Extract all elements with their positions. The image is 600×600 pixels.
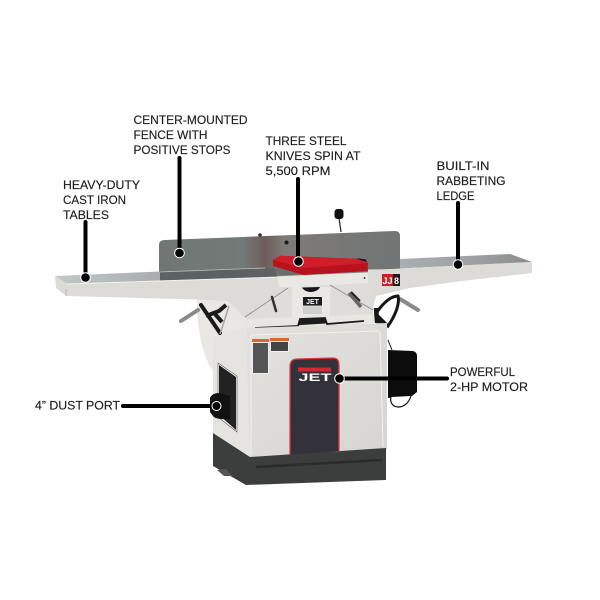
right adjustment lever — [376, 296, 418, 326]
label: heavy-duty cast iron tables: HEAVY-DUTY — [63, 178, 140, 192]
label: center-mounted fence — [134, 113, 248, 157]
JJ 8 badge — [382, 274, 400, 286]
power cord plug — [334, 209, 344, 232]
label: three steel knives: KNIVES SPIN AT — [266, 149, 361, 163]
label: powerful motor: 2-HP MOTOR — [450, 380, 528, 394]
label: built-in rabbeting ledge: RABBETING — [436, 174, 506, 188]
label: three steel knives: THREE STEEL — [266, 134, 347, 148]
leader: heavy-duty cast iron tables — [81, 222, 90, 282]
label: built-in rabbeting ledge: BUILT-IN — [436, 159, 490, 173]
label: powerful motor — [450, 365, 528, 394]
label: heavy-duty cast iron tables: CAST IRON — [63, 193, 126, 207]
JJ 8 badge: 8 — [394, 276, 399, 286]
label: heavy-duty cast iron tables — [63, 178, 140, 222]
label: built-in rabbeting ledge — [436, 159, 506, 203]
label: three steel knives — [266, 134, 361, 178]
half round cutout — [302, 287, 320, 292]
label: center-mounted fence: CENTER-MOUNTED — [134, 113, 248, 127]
label: dust port: 4” DUST PORT — [35, 398, 121, 412]
JJ 8 badge: JJ — [382, 276, 393, 286]
label: center-mounted fence: FENCE WITH — [134, 128, 208, 142]
leader: powerful motor — [335, 374, 447, 383]
under-guard dark bed — [273, 262, 368, 277]
JET door panel: JET — [298, 372, 332, 384]
label: heavy-duty cast iron tables: TABLES — [63, 208, 109, 222]
JET door panel — [290, 358, 339, 456]
leader: built-in rabbeting ledge — [453, 203, 463, 269]
cutterhead band — [277, 272, 368, 287]
leader: center-mounted fence — [175, 158, 184, 258]
nameplate — [303, 297, 322, 314]
jointer machine — [55, 209, 532, 485]
cabinet base — [213, 433, 386, 485]
label: three steel knives: 5,500 RPM — [266, 164, 331, 178]
dust port — [210, 363, 237, 432]
label: powerful motor: POWERFUL — [450, 365, 515, 379]
warning labels — [252, 338, 289, 374]
central casting — [245, 283, 376, 330]
fence — [159, 231, 400, 274]
label: center-mounted fence: POSITIVE STOPS — [134, 143, 230, 157]
label: built-in rabbeting ledge: LEDGE — [436, 189, 474, 203]
cabinet front panel — [246, 323, 387, 457]
left adjustment lever — [181, 305, 229, 334]
motor — [388, 340, 417, 407]
red blade guard — [273, 256, 368, 275]
leader: three steel knives — [294, 179, 303, 266]
leader: dust port — [123, 402, 221, 410]
chip chute curve — [197, 298, 250, 374]
nameplate: JET — [306, 299, 320, 306]
cabinet side panel — [213, 328, 252, 458]
right outfeed table and rabbeting ledge — [330, 254, 532, 312]
left infeed table — [55, 267, 292, 318]
